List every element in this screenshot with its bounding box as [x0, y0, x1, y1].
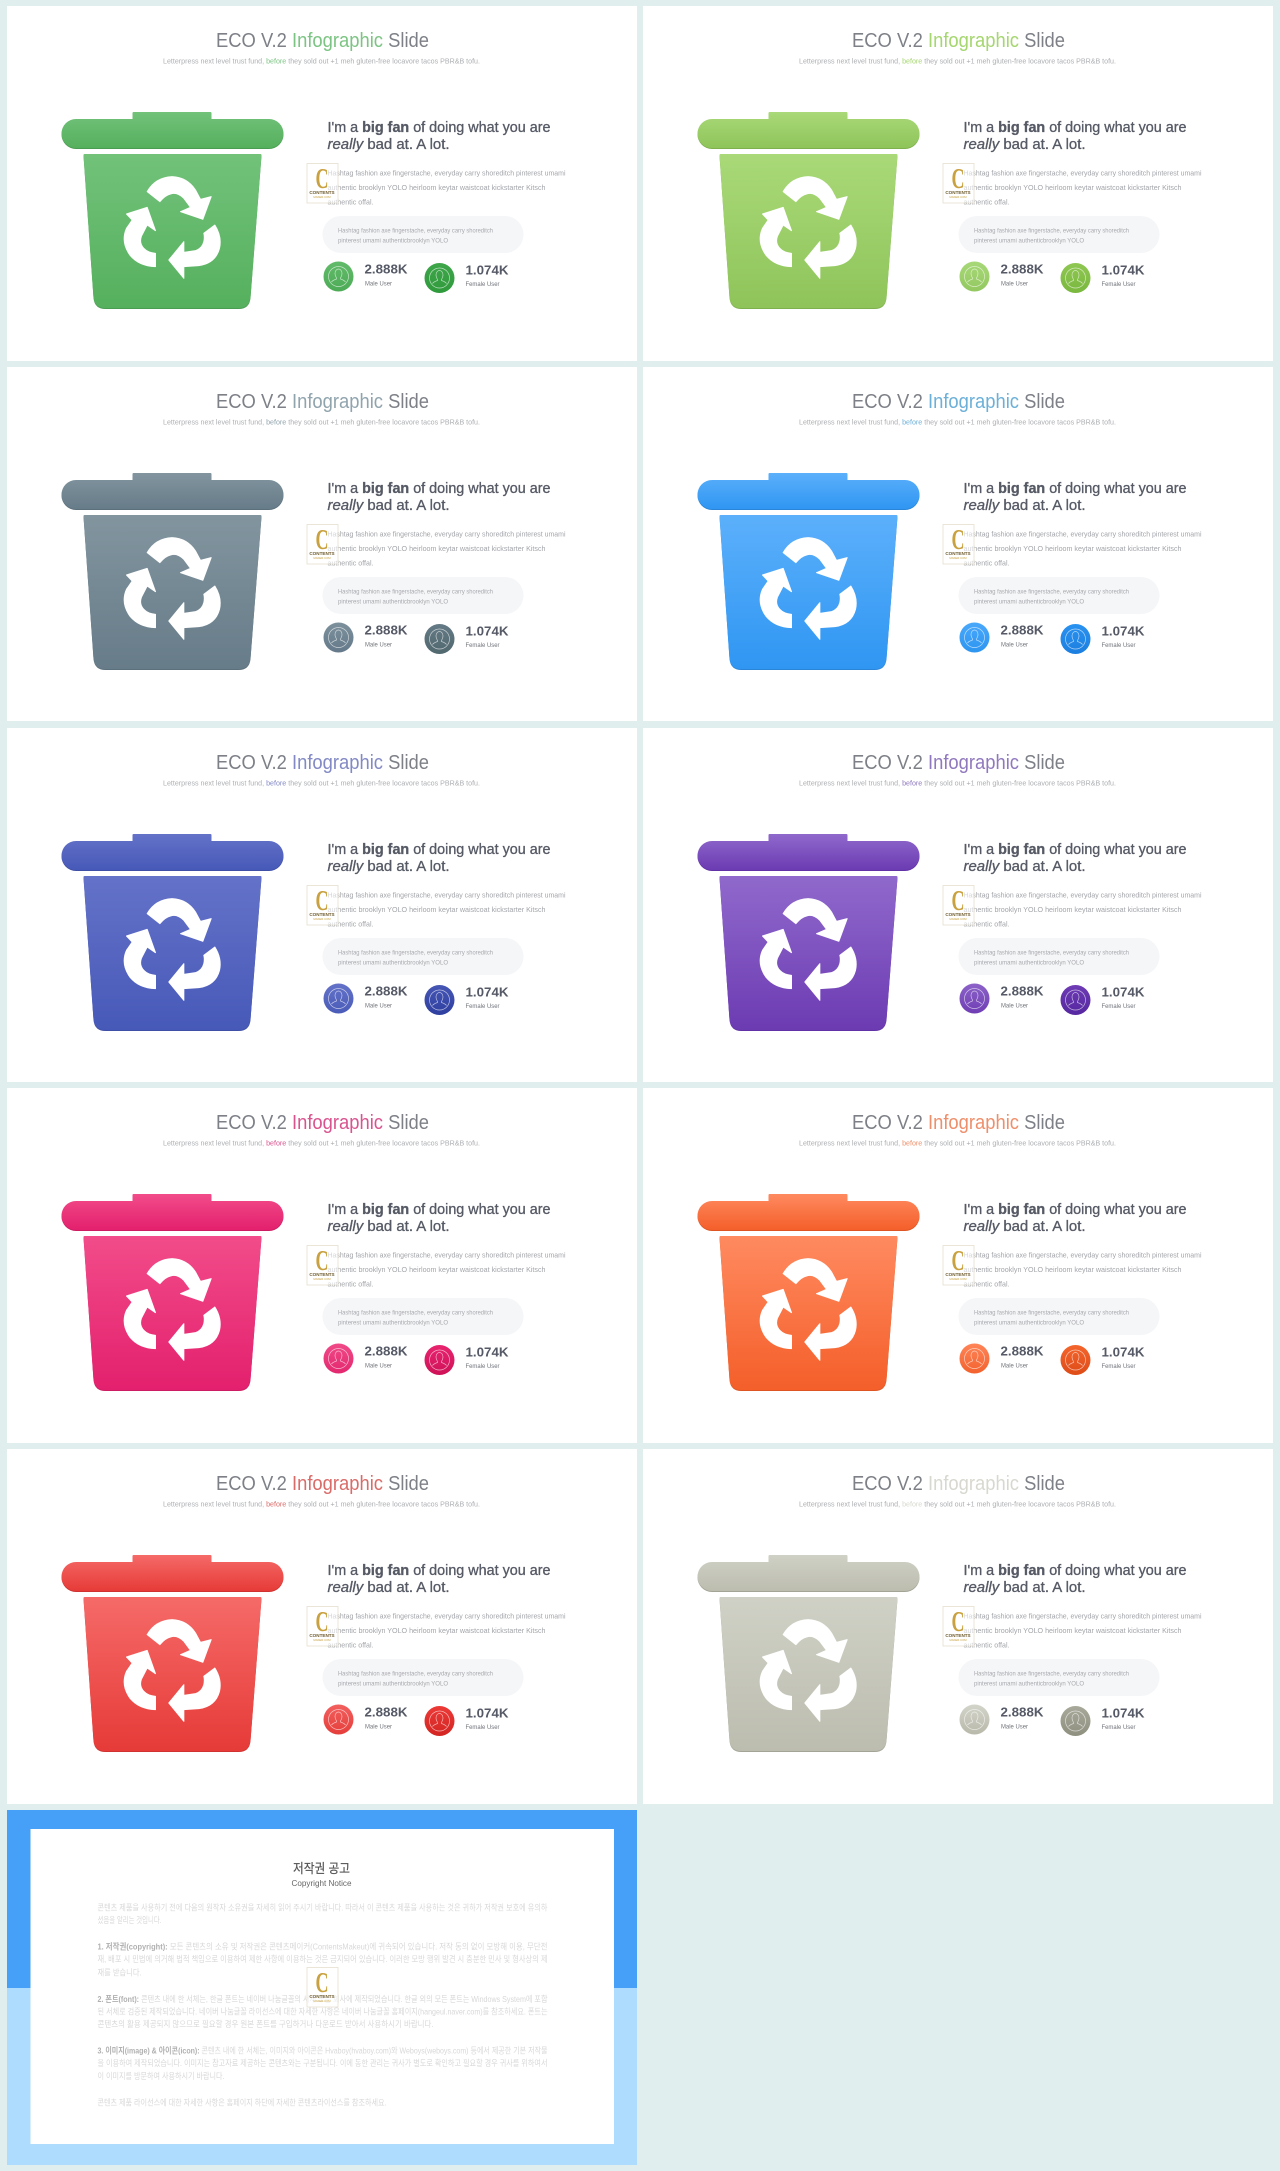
- section 2 font: 2. 폰트(font): 콘텐츠 내에 한 서체는, 한글 폰트는 네이버 나눔글꼴의 서체 또는 회사에 제작되었습니다. 한글 외의 모든 폰트는 Windows System에 포함: [97, 1994, 547, 2004]
- watermark badge: CONTENTS: [309, 1994, 334, 1999]
- stat: female user: 1.074K: [1102, 1706, 1145, 1720]
- paragraph: Hashtag fashion axe fingerstache, everyday carry shoreditch pinterest umami: [327, 529, 565, 538]
- stat: male user: 2.888K: [1000, 622, 1044, 637]
- watermark badge: [943, 163, 974, 203]
- stat: female user: [424, 262, 509, 293]
- heading: [327, 1202, 550, 1235]
- paragraph: authentic brooklyn YOLO heirloom keytar waistcoat kickstarter Kitsch: [327, 544, 545, 553]
- heading: really bad at. A lot.: [964, 498, 1086, 514]
- watermark badge: CONTENTS: [309, 912, 334, 916]
- heading: really bad at. A lot.: [327, 1219, 449, 1235]
- paragraph: Hashtag fashion axe fingerstache, everyday carry shoreditch pinterest umami: [964, 1251, 1202, 1260]
- watermark badge: CONTENTS: [945, 912, 971, 916]
- stat: female user: Female User: [1102, 1004, 1136, 1010]
- watermark badge: MAKER.COM: [313, 556, 331, 560]
- watermark badge: [943, 1245, 974, 1285]
- stat: female user: 1.074K: [465, 262, 509, 278]
- icon: recycling bin: [698, 834, 920, 1030]
- stat: female user: 1.074K: [1102, 262, 1145, 278]
- paragraph: [327, 890, 565, 928]
- stat: male user: [960, 1704, 1044, 1734]
- icon: recycling bin: [698, 112, 920, 309]
- stat: male user: Male User: [364, 1364, 392, 1370]
- stat: female user: Female User: [465, 1364, 499, 1370]
- quote pill: Hashtag fashion axe fingerstache, everyday carry shoreditch: [974, 588, 1129, 595]
- watermark badge: MAKER.COM: [949, 1277, 967, 1281]
- watermark badge: C: [315, 524, 328, 556]
- quote pill: [958, 1298, 1160, 1335]
- watermark badge: CONTENTS: [945, 1272, 971, 1277]
- panel: green slide: [6, 6, 636, 360]
- stat: male user: [323, 1704, 408, 1734]
- quote pill: Hashtag fashion axe fingerstache, everyday carry shoreditch: [974, 1670, 1129, 1678]
- paragraph: [964, 529, 1202, 567]
- stat: female user: 1.074K: [465, 984, 509, 999]
- section 2 font: 콘텐츠의 활용 제공되지 않으므로 필요할 경우 원본 폰트를 구입하거나 다운로드 받아서 사용하시기 바랍니다.: [97, 2019, 433, 2029]
- quote pill: Hashtag fashion axe fingerstache, everyday carry shoreditch: [338, 1310, 493, 1317]
- paragraph: Hashtag fashion axe fingerstache, everyday carry shoreditch pinterest umami: [327, 1612, 565, 1620]
- paragraph: [327, 529, 565, 567]
- quote pill: [322, 1659, 523, 1696]
- quote pill: Hashtag fashion axe fingerstache, everyday carry shoreditch: [338, 949, 493, 956]
- stat: male user: Male User: [364, 282, 392, 288]
- stat: male user: Male User: [364, 642, 392, 648]
- heading: [327, 842, 550, 874]
- heading: really bad at. A lot.: [964, 858, 1086, 874]
- heading: [964, 842, 1186, 874]
- stat: female user: Female User: [465, 1725, 499, 1731]
- quote pill: Hashtag fashion axe fingerstache, everyday carry shoreditch: [974, 228, 1129, 234]
- quote pill: pinterest umami authenticbrooklyn YOLO: [974, 1680, 1084, 1688]
- watermark badge: MAKER.COM: [313, 916, 331, 920]
- paragraph: authentic offal.: [964, 1280, 1010, 1289]
- icon: recycling bin: [698, 1555, 920, 1752]
- stat: male user: [323, 622, 408, 652]
- heading: I'm a big fan of doing what you are: [964, 842, 1186, 858]
- paragraph: Hashtag fashion axe fingerstache, everyday carry shoreditch pinterest umami: [327, 1251, 565, 1260]
- stat: female user: [1060, 262, 1145, 293]
- subtitle: Letterpress next level trust fund, before they sold out +1 meh gluten-free locavore tacos PBR&B tofu.: [799, 778, 1116, 787]
- heading: really bad at. A lot.: [327, 498, 449, 514]
- quote pill: Hashtag fashion axe fingerstache, everyday carry shoreditch: [974, 1310, 1129, 1317]
- stat: male user: 2.888K: [364, 1704, 408, 1720]
- copyright title: 저작권 공고: [292, 1861, 350, 1876]
- heading: really bad at. A lot.: [327, 858, 449, 874]
- stat: female user: [424, 984, 509, 1014]
- closing line: 콘텐츠 제품 라이선스에 대한 자세한 사항은 홈페이지 하단에 자세한 콘텐츠라이선스를 참조하세요.: [97, 2098, 386, 2108]
- watermark badge: MAKER.COM: [949, 195, 967, 199]
- stat: female user: Female User: [1102, 1725, 1136, 1731]
- quote pill: pinterest umami authenticbrooklyn YOLO: [974, 1320, 1084, 1327]
- subtitle: Letterpress next level trust fund, before they sold out +1 meh gluten-free locavore tacos PBR&B tofu.: [162, 1139, 480, 1148]
- section 2 font: 된 서체로 검증된 제작되었습니다. 네이버 나눔글꼴 라이선스에 대한 자세한 사항은 네이버 나눔글꼴 홈페이지(hangeul.naver.com)를 참조하세요. 폰트는: [97, 2006, 547, 2016]
- watermark badge: MAKER.COM: [313, 1999, 331, 2003]
- stat: female user: 1.074K: [1102, 1345, 1145, 1360]
- heading: [964, 1563, 1186, 1596]
- stat: female user: Female User: [465, 643, 499, 649]
- stat: male user: Male User: [1001, 642, 1028, 648]
- stat: female user: Female User: [465, 1004, 499, 1010]
- heading: I'm a big fan of doing what you are: [327, 1563, 550, 1579]
- panel: purple slide: [643, 728, 1273, 1082]
- title: ECO V.2 Infographic Slide: [216, 30, 428, 52]
- paragraph: authentic brooklyn YOLO heirloom keytar waistcoat kickstarter Kitsch: [327, 1265, 545, 1274]
- heading: I'm a big fan of doing what you are: [327, 1202, 550, 1218]
- stat: female user: 1.074K: [465, 623, 509, 638]
- subtitle: Letterpress next level trust fund, before they sold out +1 meh gluten-free locavore tacos PBR&B tofu.: [162, 417, 480, 426]
- stat: female user: Female User: [465, 282, 499, 288]
- heading: really bad at. A lot.: [327, 137, 449, 153]
- panel: indigo slide: [6, 728, 636, 1082]
- stat: female user: [1060, 1345, 1145, 1375]
- section 3 image and icon: 을 이용하여 제작되었습니다. 이미지는 참고자료 제공하는 콘텐츠와는 구분됩니다. 이에 동한 관리는 귀사가 별도로 확인하고 필요할 경우 귀사를 위하여서: [97, 2058, 547, 2068]
- paragraph: authentic offal.: [964, 558, 1010, 567]
- watermark badge: MAKER.COM: [313, 195, 331, 199]
- icon: recycling bin: [61, 473, 283, 670]
- watermark badge: [306, 163, 338, 203]
- paragraph: authentic offal.: [327, 558, 373, 567]
- stat: male user: Male User: [1001, 282, 1028, 288]
- stat: male user: [960, 262, 1044, 292]
- watermark badge: [943, 884, 974, 924]
- quote pill: [958, 1659, 1160, 1696]
- title: ECO V.2 Infographic Slide: [852, 752, 1065, 774]
- paragraph: Hashtag fashion axe fingerstache, everyday carry shoreditch pinterest umami: [327, 168, 565, 178]
- section 1 copyright: 1. 저작권(copyright): 모든 콘텐츠의 소유 및 저작권은 콘텐츠메이커(ContentsMakeut)에 귀속되어 있습니다. 저작 동의 없이 모방해 이용, 무단전: [97, 1942, 547, 1952]
- quote pill: [958, 216, 1160, 253]
- title: ECO V.2 Infographic Slide: [216, 391, 428, 413]
- icon: recycling bin: [61, 834, 283, 1030]
- stat: female user: [424, 1345, 509, 1375]
- panel: orange slide: [643, 1088, 1273, 1443]
- paragraph: Hashtag fashion axe fingerstache, everyday carry shoreditch pinterest umami: [964, 529, 1202, 538]
- section 3 image and icon: 이 이미지를 방문하여 사용하시기 바랍니다.: [97, 2071, 224, 2081]
- subtitle: Letterpress next level trust fund, before they sold out +1 meh gluten-free locavore tacos PBR&B tofu.: [162, 1500, 480, 1508]
- watermark badge: MAKER.COM: [313, 1277, 331, 1281]
- title: ECO V.2 Infographic Slide: [216, 1473, 428, 1495]
- watermark badge: MAKER.COM: [949, 916, 967, 920]
- watermark badge: CONTENTS: [945, 551, 971, 556]
- stat: male user: [960, 983, 1044, 1013]
- stat: male user: Male User: [1001, 1003, 1028, 1009]
- quote pill: Hashtag fashion axe fingerstache, everyday carry shoreditch: [974, 949, 1129, 956]
- paragraph: authentic offal.: [964, 1640, 1010, 1650]
- quote pill: pinterest umami authenticbrooklyn YOLO: [974, 238, 1084, 244]
- watermark badge: [943, 1606, 974, 1646]
- watermark badge: CONTENTS: [309, 190, 334, 195]
- heading: I'm a big fan of doing what you are: [964, 120, 1186, 136]
- panel: copyright notice: [7, 1810, 637, 2165]
- stat: male user: [960, 1344, 1044, 1374]
- stat: male user: 2.888K: [364, 1344, 408, 1359]
- quote pill: pinterest umami authenticbrooklyn YOLO: [338, 959, 448, 966]
- stat: male user: [323, 262, 408, 292]
- paragraph: authentic brooklyn YOLO heirloom keytar waistcoat kickstarter Kitsch: [327, 1626, 545, 1635]
- title: ECO V.2 Infographic Slide: [852, 1473, 1065, 1495]
- paragraph: [964, 890, 1202, 928]
- watermark badge: [306, 1967, 338, 2007]
- watermark badge: MAKER.COM: [949, 1638, 967, 1642]
- watermark badge: CONTENTS: [945, 1633, 971, 1638]
- stat: male user: 2.888K: [364, 983, 408, 998]
- watermark badge: [943, 524, 974, 564]
- stat: female user: 1.074K: [1102, 984, 1145, 999]
- stat: male user: 2.888K: [364, 622, 408, 637]
- paragraph: Hashtag fashion axe fingerstache, everyday carry shoreditch pinterest umami: [964, 168, 1202, 178]
- heading: [327, 120, 550, 153]
- quote pill: [958, 577, 1160, 614]
- watermark badge: C: [315, 163, 328, 195]
- intro text: [97, 1902, 547, 1925]
- paragraph: authentic brooklyn YOLO heirloom keytar waistcoat kickstarter Kitsch: [964, 1265, 1182, 1274]
- watermark badge: [306, 524, 338, 564]
- heading: [964, 481, 1186, 514]
- heading: [964, 1202, 1186, 1235]
- heading: I'm a big fan of doing what you are: [964, 1202, 1186, 1218]
- quote pill: pinterest umami authenticbrooklyn YOLO: [974, 959, 1084, 966]
- paragraph: Hashtag fashion axe fingerstache, everyday carry shoreditch pinterest umami: [964, 1612, 1202, 1620]
- heading: I'm a big fan of doing what you are: [964, 1563, 1186, 1579]
- watermark badge: MAKER.COM: [313, 1638, 331, 1642]
- panel: beige slide: [643, 1449, 1273, 1804]
- subtitle: Letterpress next level trust fund, before they sold out +1 meh gluten-free locavore tacos PBR&B tofu.: [799, 1500, 1116, 1508]
- icon: recycling bin: [61, 112, 283, 309]
- paragraph: [964, 168, 1202, 206]
- panel: blue slide: [643, 367, 1273, 721]
- paragraph: authentic offal.: [327, 919, 373, 928]
- section 1 copyright: 재를 받습니다.: [97, 1968, 141, 1978]
- white notice card: [30, 1829, 614, 2144]
- paragraph: authentic offal.: [964, 919, 1010, 928]
- watermark badge: C: [952, 524, 964, 556]
- heading: really bad at. A lot.: [964, 1219, 1086, 1235]
- quote pill: [322, 216, 523, 253]
- paragraph: authentic offal.: [327, 198, 373, 206]
- watermark badge: C: [952, 1606, 964, 1638]
- watermark badge: C: [315, 1967, 328, 1999]
- section 3 image and icon: 3. 이미지(image) & 아이콘(icon): 콘텐츠 내에 한 서체는, 이미지와 아이콘은 Hvaboy(hvaboy.com)와 Weboys(weboys.com) 등에서 제공한 기본 저작물: [97, 2046, 547, 2056]
- paragraph: [964, 1612, 1202, 1650]
- intro text: 셨음을 알리는 것입니다.: [97, 1915, 161, 1925]
- heading: really bad at. A lot.: [964, 137, 1086, 153]
- paragraph: authentic brooklyn YOLO heirloom keytar waistcoat kickstarter Kitsch: [327, 904, 545, 914]
- paragraph: [327, 1612, 565, 1650]
- stat: male user: 2.888K: [1000, 262, 1044, 276]
- stat: male user: Male User: [364, 1724, 392, 1730]
- heading: [327, 481, 550, 514]
- panel: lime slide: [643, 6, 1273, 360]
- quote pill: pinterest umami authenticbrooklyn YOLO: [338, 1680, 448, 1688]
- quote pill: pinterest umami authenticbrooklyn YOLO: [974, 598, 1084, 605]
- quote pill: Hashtag fashion axe fingerstache, everyday carry shoreditch: [338, 228, 493, 234]
- icon: recycling bin: [61, 1194, 283, 1391]
- paragraph: [327, 1251, 565, 1289]
- section 1 copyright: [97, 1942, 547, 1978]
- stat: male user: [323, 983, 408, 1013]
- copyright subtitle: Copyright Notice: [291, 1879, 352, 1888]
- paragraph: [964, 1251, 1202, 1289]
- subtitle: Letterpress next level trust fund, before they sold out +1 meh gluten-free locavore tacos PBR&B tofu.: [799, 56, 1116, 66]
- paragraph: [327, 168, 565, 206]
- quote pill: [322, 938, 523, 974]
- title: ECO V.2 Infographic Slide: [216, 752, 428, 774]
- section 3 image and icon: [97, 2046, 547, 2081]
- section 2 font: [97, 1994, 547, 2029]
- stat: female user: Female User: [1102, 643, 1136, 649]
- icon: recycling bin: [698, 1194, 920, 1391]
- paragraph: Hashtag fashion axe fingerstache, everyday carry shoreditch pinterest umami: [964, 890, 1202, 899]
- watermark badge: C: [952, 884, 964, 916]
- stat: male user: Male User: [364, 1003, 392, 1009]
- quote pill: pinterest umami authenticbrooklyn YOLO: [338, 238, 448, 244]
- panel: slate slide: [6, 367, 636, 721]
- heading: I'm a big fan of doing what you are: [327, 842, 550, 858]
- icon: recycling bin: [698, 473, 920, 670]
- title: ECO V.2 Infographic Slide: [852, 1112, 1065, 1134]
- stat: female user: [1060, 984, 1145, 1014]
- watermark badge: C: [315, 1245, 328, 1277]
- watermark badge: MAKER.COM: [949, 556, 967, 560]
- heading: I'm a big fan of doing what you are: [327, 481, 550, 497]
- heading: really bad at. A lot.: [964, 1580, 1086, 1596]
- watermark badge: [306, 1245, 338, 1285]
- heading: I'm a big fan of doing what you are: [327, 120, 550, 136]
- watermark badge: CONTENTS: [309, 1272, 334, 1277]
- stat: female user: 1.074K: [465, 1345, 509, 1360]
- paragraph: authentic brooklyn YOLO heirloom keytar waistcoat kickstarter Kitsch: [964, 183, 1182, 192]
- stat: male user: 2.888K: [364, 262, 408, 276]
- subtitle: Letterpress next level trust fund, before they sold out +1 meh gluten-free locavore tacos PBR&B tofu.: [799, 1139, 1116, 1148]
- panel: red slide: [6, 1449, 636, 1804]
- title: ECO V.2 Infographic Slide: [852, 391, 1065, 413]
- subtitle: Letterpress next level trust fund, before they sold out +1 meh gluten-free locavore tacos PBR&B tofu.: [799, 417, 1116, 426]
- stat: female user: Female User: [1102, 1364, 1136, 1370]
- intro text: 콘텐츠 제품을 사용하기 전에 다음의 원작자 소유권을 자세히 읽어 주시기 바랍니다. 따라서 이 콘텐츠 제품을 사용하는 것은 귀하가 저작권 보호에 유의하: [97, 1902, 547, 1912]
- stat: female user: [1060, 1706, 1145, 1736]
- section 1 copyright: 재, 배포 시 민법에 의거해 법적 책임으로 이용하여 제한 사항에 이용하는 것은 금지되어 있습니다. 이러한 모방 행위 발견 시 충분한 민사 및 형사상의 제: [97, 1954, 547, 1964]
- paragraph: authentic offal.: [964, 198, 1010, 206]
- quote pill: [958, 938, 1160, 974]
- paragraph: authentic brooklyn YOLO heirloom keytar waistcoat kickstarter Kitsch: [964, 544, 1182, 553]
- quote pill: [322, 1298, 523, 1335]
- watermark badge: [306, 884, 338, 924]
- title: ECO V.2 Infographic Slide: [852, 30, 1065, 52]
- watermark badge: C: [315, 884, 328, 916]
- watermark badge: C: [315, 1606, 328, 1638]
- watermark badge: C: [952, 1245, 964, 1277]
- paragraph: authentic offal.: [327, 1280, 373, 1289]
- heading: I'm a big fan of doing what you are: [964, 481, 1186, 497]
- stat: male user: Male User: [1001, 1724, 1028, 1730]
- stat: male user: 2.888K: [1000, 1344, 1044, 1359]
- quote pill: Hashtag fashion axe fingerstache, everyday carry shoreditch: [338, 1670, 493, 1678]
- paragraph: Hashtag fashion axe fingerstache, everyday carry shoreditch pinterest umami: [327, 890, 565, 899]
- stat: male user: Male User: [1001, 1364, 1028, 1370]
- watermark badge: C: [952, 163, 964, 195]
- stat: male user: [323, 1344, 408, 1374]
- quote pill: [322, 577, 523, 614]
- stat: male user: 2.888K: [1000, 983, 1044, 998]
- quote pill: pinterest umami authenticbrooklyn YOLO: [338, 598, 448, 605]
- heading: really bad at. A lot.: [327, 1580, 449, 1596]
- quote pill: pinterest umami authenticbrooklyn YOLO: [338, 1320, 448, 1327]
- stat: female user: Female User: [1102, 282, 1136, 288]
- watermark badge: CONTENTS: [309, 1633, 334, 1638]
- watermark badge: CONTENTS: [309, 551, 334, 556]
- paragraph: authentic brooklyn YOLO heirloom keytar waistcoat kickstarter Kitsch: [964, 1626, 1182, 1635]
- title: ECO V.2 Infographic Slide: [216, 1112, 428, 1134]
- icon: recycling bin: [61, 1555, 283, 1752]
- heading: [327, 1563, 550, 1596]
- paragraph: authentic brooklyn YOLO heirloom keytar waistcoat kickstarter Kitsch: [964, 904, 1182, 914]
- watermark badge: CONTENTS: [945, 190, 971, 195]
- watermark badge: [306, 1606, 338, 1646]
- stat: female user: [1060, 623, 1145, 654]
- stat: female user: [424, 1706, 509, 1736]
- subtitle: Letterpress next level trust fund, before they sold out +1 meh gluten-free locavore tacos PBR&B tofu.: [162, 56, 480, 66]
- quote pill: Hashtag fashion axe fingerstache, everyday carry shoreditch: [338, 588, 493, 595]
- stat: female user: [424, 623, 509, 654]
- subtitle: Letterpress next level trust fund, before they sold out +1 meh gluten-free locavore tacos PBR&B tofu.: [162, 778, 480, 787]
- stat: female user: 1.074K: [465, 1706, 509, 1720]
- heading: [964, 120, 1186, 153]
- panel: pink slide: [6, 1088, 636, 1443]
- stat: female user: 1.074K: [1102, 623, 1145, 638]
- stat: male user: 2.888K: [1000, 1704, 1044, 1720]
- stat: male user: [960, 622, 1044, 652]
- paragraph: authentic brooklyn YOLO heirloom keytar waistcoat kickstarter Kitsch: [327, 183, 545, 192]
- paragraph: authentic offal.: [327, 1640, 373, 1650]
